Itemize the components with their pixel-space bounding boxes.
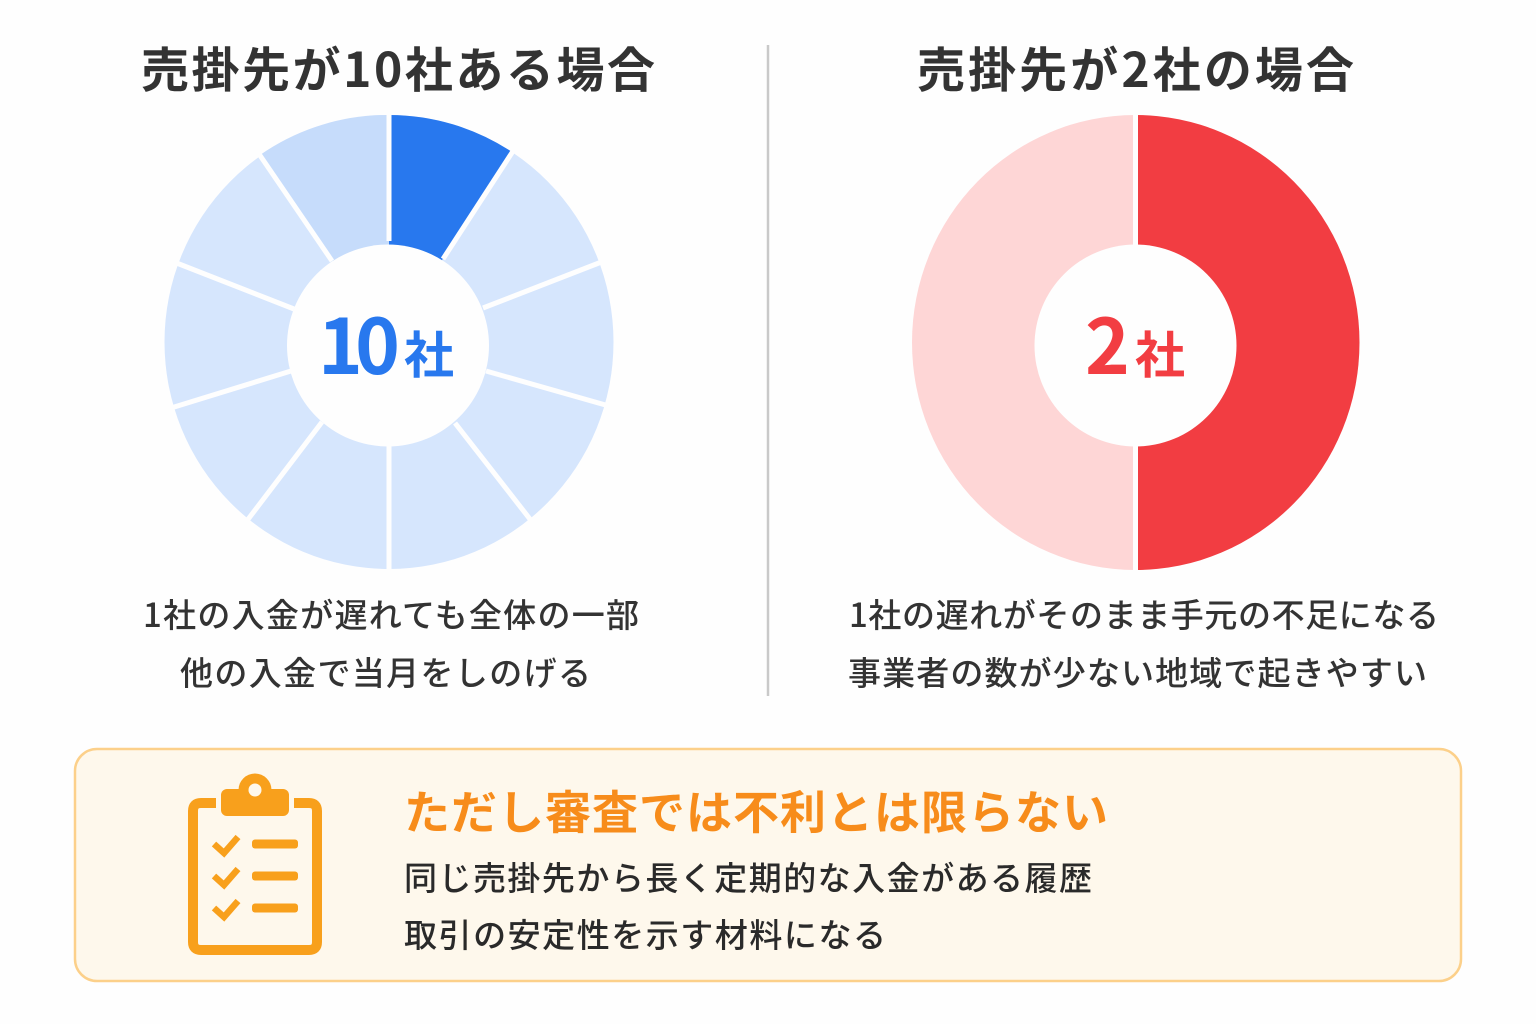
caption: 2 clients [848,589,1439,695]
caption: 2 clients: 1社の遅れがそのまま手元の不足になる [849,589,1439,637]
center label: 10社: 10 [318,286,400,396]
divider [767,45,769,696]
center label: 2社: 2 [1085,286,1130,396]
heading: 2 clients: 売掛先が2社の場合 [917,31,1354,101]
caption: 10 clients [143,589,639,695]
center label: 2社: 社 [1135,316,1185,388]
callout background [75,749,1461,981]
center label: 10社 [318,286,454,396]
highlighted segment [389,115,512,342]
donut chart: 2 segments [912,110,1360,575]
red half segment [1136,115,1360,570]
callout text: 同じ売掛先から長く定期的な入金がある履歴 [404,852,1092,900]
center label: 2社 [1085,286,1185,396]
callout heading: ただし審査では不利とは限らない [404,777,1108,843]
panel: 10 clients [141,31,655,695]
secondary segment [260,115,389,342]
caption: 10 clients: 1社の入金が遅れても全体の一部 [143,589,639,637]
callout text: 取引の安定性を示す材料になる [404,909,886,957]
donut hole [1034,244,1236,446]
pale half segment [912,115,1136,570]
heading: 10 clients: 売掛先が10社ある場合 [141,31,655,101]
center label: 10社: 社 [404,316,454,388]
caption: 2 clients: 事業者の数が少ない地域で起きやすい [848,647,1427,695]
callout panel [75,749,1461,981]
icon: clipboard checklist [193,774,317,950]
caption: 10 clients: 他の入金で当月をしのげる [180,647,591,695]
donut chart: 10 segments [164,110,614,575]
donut hole [287,244,489,446]
base ring segments [164,115,614,569]
callout text [404,852,1092,957]
panel: 2 clients [848,31,1439,695]
